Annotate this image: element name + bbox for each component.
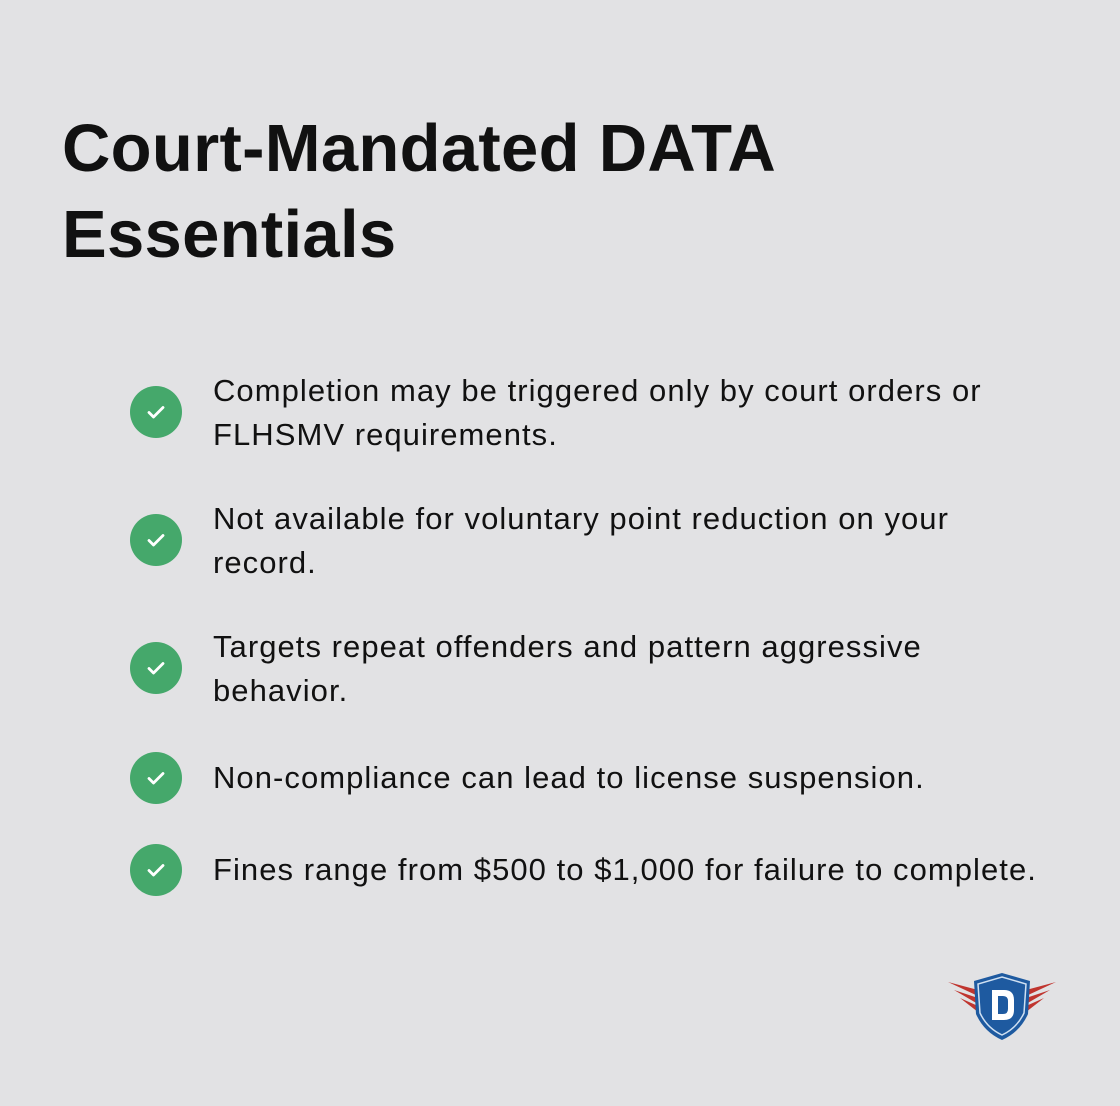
title: Court-Mandated DATA [62, 111, 776, 186]
title: Essentials [62, 197, 396, 272]
icon: check [130, 386, 182, 438]
icon: check [130, 752, 182, 804]
text: Targets repeat offenders and pattern aggressive [213, 629, 922, 664]
text: Fines range from $500 to $1,000 for failure to complete. [213, 852, 1037, 887]
text: Non-compliance can lead to license suspension. [213, 760, 925, 795]
text [213, 501, 949, 580]
text [213, 373, 982, 452]
icon: check [130, 642, 182, 694]
title [62, 111, 776, 272]
text: Completion may be triggered only by court orders or [213, 373, 982, 408]
icon: check [130, 844, 182, 896]
text: behavior. [213, 673, 348, 708]
item 2 [130, 501, 949, 580]
icon: check [130, 514, 182, 566]
text [213, 629, 922, 708]
text: FLHSMV requirements. [213, 417, 558, 452]
item 5 [130, 844, 1037, 896]
text: Not available for voluntary point reduction on your [213, 501, 949, 536]
logo [948, 973, 1056, 1040]
item 1 [130, 373, 982, 452]
text: record. [213, 545, 317, 580]
item 4 [130, 752, 925, 804]
item 3 [130, 629, 922, 708]
